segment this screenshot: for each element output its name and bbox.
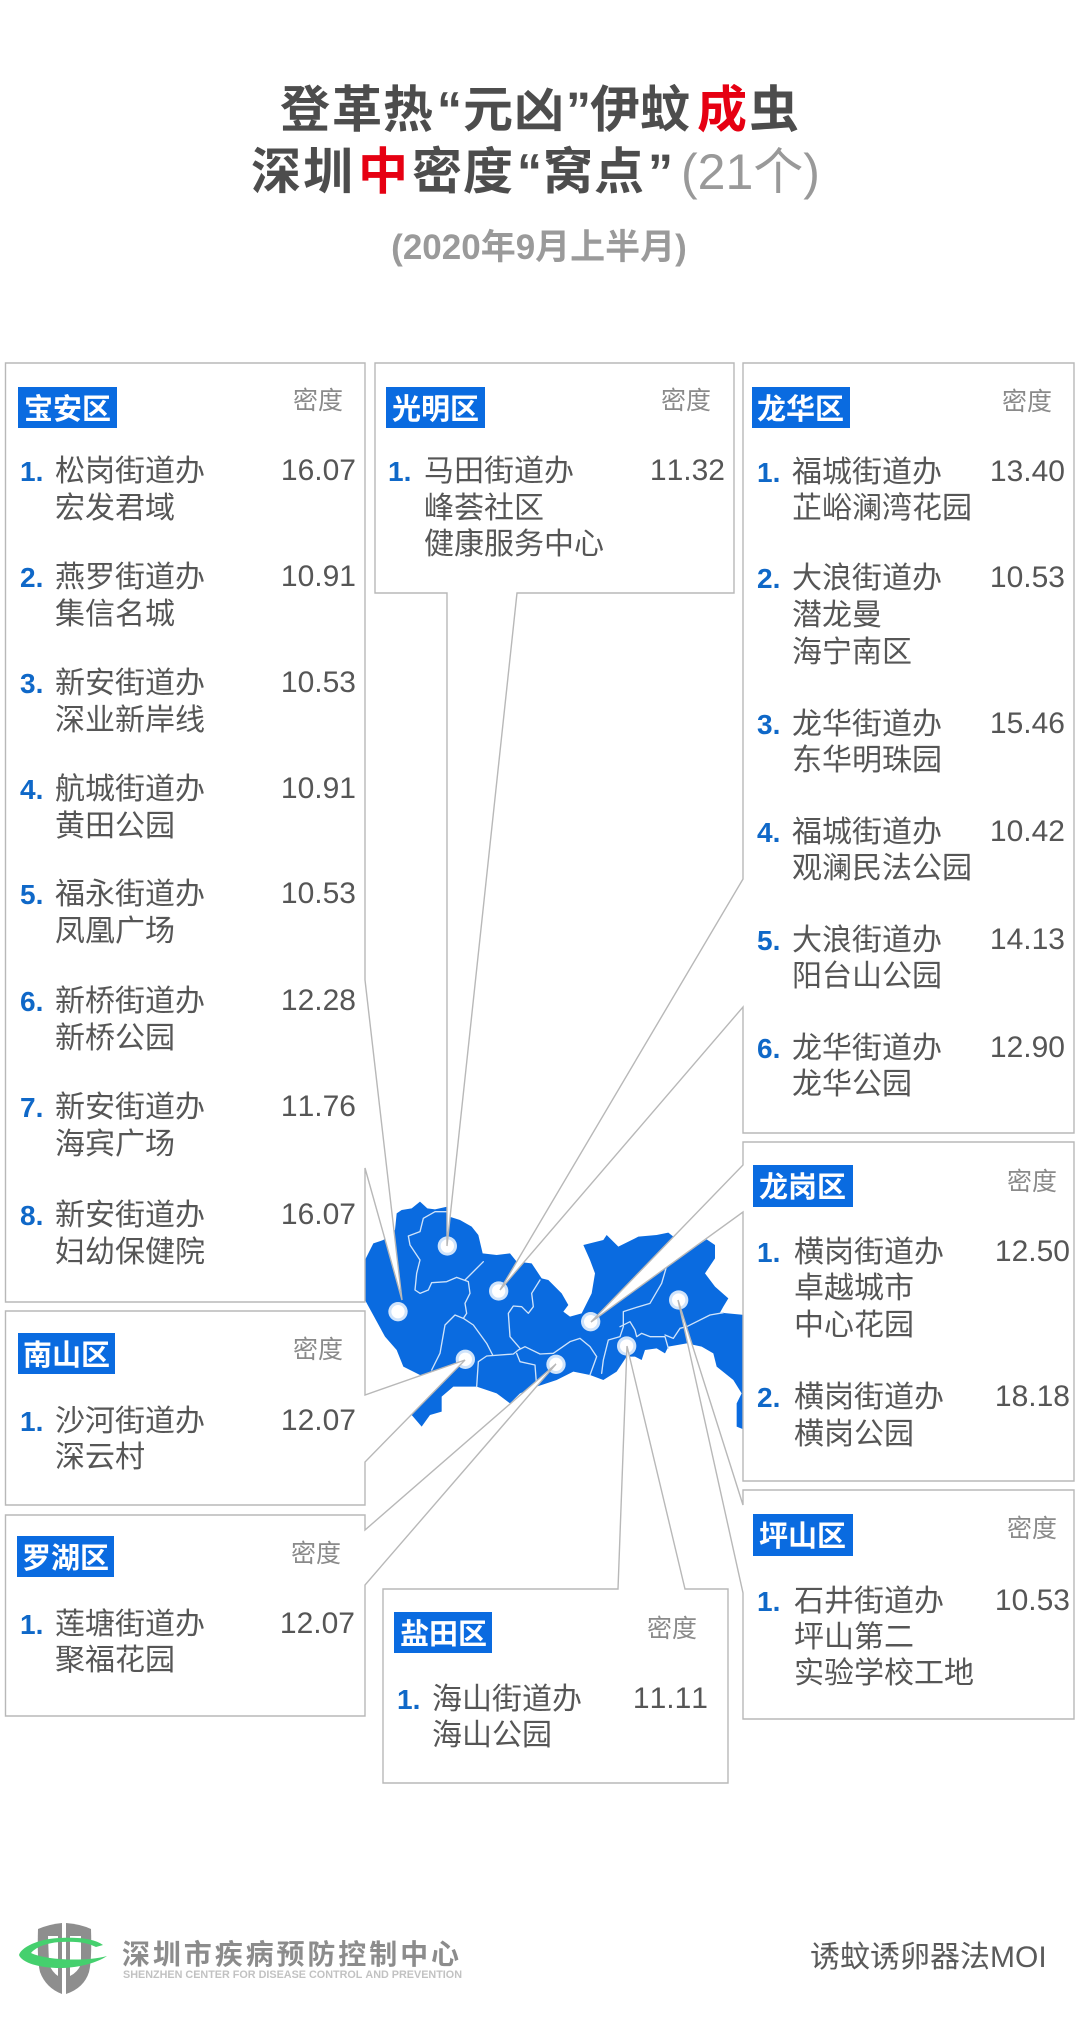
panel: 罗湖区: 聚福花园 [55,1644,175,1677]
panel: 宝安区: 16.07 [281,1198,356,1231]
panel: 坪山区: 坪山第二 [794,1621,914,1654]
panel: 宝安区: 10.53 [281,666,356,699]
panel: 龙华区: 福城街道办 [792,456,942,489]
panel: 南山区: 密度 [293,1336,343,1364]
title: 登革热“元凶”伊蚊 [280,82,690,138]
panel: 宝安区: 新桥街道办 [55,985,205,1018]
panel: 宝安区: 航城街道办 [55,773,205,806]
title: 深圳 [251,144,353,200]
organisation name: SHENZHEN CENTER FOR DISEASE CONTROL AND PREVENTION [123,1969,462,1981]
panel: 盐田区: 11.11 [633,1682,708,1715]
panel: 龙华区: 5. [757,925,780,956]
panel: 龙华区: 龙华区 [757,393,844,426]
title: 成 [697,82,747,138]
panel: 宝安区: 松岗街道办 [55,455,205,488]
title: 虫 [749,82,799,138]
panel: 龙岗区: 1. [757,1237,780,1268]
panel: 龙华区: 龙华公园 [792,1068,912,1101]
subtitle: date: (2020年9月上半月) [391,228,687,267]
title [251,82,820,200]
panel: 罗湖区: 莲塘街道办 [55,1608,205,1641]
title: 密度“窝点” [412,144,673,200]
panel: 盐田区: 海山公园 [432,1719,552,1752]
panel: 宝安区: 新安街道办 [55,1199,205,1232]
panel: 宝安区: 燕罗街道办 [55,561,205,594]
panel: 光明区: 1. [388,456,411,487]
panel: 罗湖区: 1. [20,1609,43,1640]
panel: 南山区: 南山区 [23,1339,110,1372]
panel: 龙岗区: 12.50 [995,1235,1070,1268]
panel: 光明区: 光明区 [392,393,479,426]
panel: 龙华区: 密度 [1002,388,1052,416]
panel: 坪山区: 密度 [1007,1515,1057,1543]
panel: 宝安区: 10.91 [281,772,356,805]
panel: 宝安区: 7. [20,1092,43,1123]
panel: 坪山区: 石井街道办 [794,1585,944,1618]
method note: 诱蚊诱卵器法MOI [810,1941,1047,1974]
panel: 坪山区 [678,1300,1074,1719]
panel: 盐田区 [383,1346,728,1783]
panel: 坪山区: 坪山区 [759,1520,846,1553]
panel: 龙华区: 芷峪澜湾花园 [792,492,972,525]
panel: 龙岗区: 龙岗区 [759,1171,846,1204]
panel: 龙华区: 13.40 [990,455,1065,488]
panel: 宝安区: 福永街道办 [55,878,205,911]
panel: 宝安区: 16.07 [281,454,356,487]
panel: 宝安区: 4. [20,774,43,805]
title: 中 [358,144,408,200]
panel: 南山区: 沙河街道办 [55,1405,205,1438]
panel: 盐田区: 盐田区 [400,1618,487,1651]
panel: 龙华区: 大浪街道办 [792,562,942,595]
panel: 宝安区: 12.28 [281,984,356,1017]
panel: 宝安区: 10.91 [281,560,356,593]
panel: 宝安区: 凤凰广场 [55,915,175,948]
panel: 龙华区: 福城街道办 [792,816,942,849]
organisation name: 深圳市疾病预防控制中心 [122,1939,462,1970]
panel: 盐田区: 海山街道办 [432,1683,582,1716]
panel: 龙华区: 2. [757,563,780,594]
panel: 龙岗区: 横岗街道办 [794,1381,944,1414]
panel: 宝安区: 深业新岸线 [55,704,205,737]
title: (21个) [681,144,820,200]
panel: 宝安区: 黄田公园 [55,810,175,843]
panel: 宝安区: 新安街道办 [55,667,205,700]
map of Shenzhen [365,1202,745,1430]
panel: 龙华区: 龙华街道办 [792,708,942,741]
panel: 龙岗区: 18.18 [995,1380,1070,1413]
panel: 龙岗区: 密度 [1007,1168,1057,1196]
panel: 坪山区: 实验学校工地 [794,1657,974,1690]
panel: 宝安区: 妇幼保健院 [55,1236,205,1269]
panel: 宝安区: 5. [20,879,43,910]
panel: 宝安区: 宏发君域 [55,492,175,525]
panel: 龙岗区: 横岗街道办 [794,1236,944,1269]
panel: 龙华区: 1. [757,457,780,488]
panel: 龙华区: 观澜民法公园 [792,852,972,885]
panel: 罗湖区 [6,1364,556,1716]
panel: 宝安区: 1. [20,456,43,487]
panel: 南山区 [6,1311,465,1505]
panel: 盐田区: 1. [397,1684,420,1715]
panel: 龙华区: 12.90 [990,1031,1065,1064]
panel: 宝安区: 2. [20,562,43,593]
panel: 光明区: 健康服务中心 [424,528,604,561]
panel: 罗湖区: 密度 [291,1540,341,1568]
panel: 宝安区: 密度 [293,387,343,415]
panel: 龙岗区: 中心花园 [794,1309,914,1342]
panel: 龙岗区: 卓越城市 [794,1272,914,1305]
panel: 龙华区: 10.53 [990,561,1065,594]
panel: 龙华区: 大浪街道办 [792,924,942,957]
panel: 光明区: 11.32 [650,454,725,487]
panel: 龙华区: 10.42 [990,815,1065,848]
panel: 龙华区: 6. [757,1033,780,1064]
map location dots [388,1236,688,1374]
panel: 宝安区: 宝安区 [24,393,111,426]
logo: Shenzhen CDC emblem [19,1923,107,1994]
panel: 龙华区: 14.13 [990,923,1065,956]
panel: 宝安区: 11.76 [281,1090,356,1123]
panel: 龙华区: 海宁南区 [792,636,912,669]
panel: 宝安区: 6. [20,986,43,1017]
panel: 宝安区: 8. [20,1200,43,1231]
panel: 龙华区: 潜龙曼 [792,599,882,632]
panel: 龙岗区: 2. [757,1382,780,1413]
panel: 龙华区: 3. [757,709,780,740]
panel: 光明区: 峰荟社区 [424,492,544,525]
panel: 龙岗区: 横岗公园 [794,1418,914,1451]
panel: 宝安区: 10.53 [281,877,356,910]
panel: 龙华区 [500,363,1074,1290]
panel: 宝安区: 集信名城 [55,598,175,631]
panel: 光明区 [375,363,734,1246]
panel: 龙华区: 东华明珠园 [792,744,942,777]
panel: 龙华区: 15.46 [990,707,1065,740]
panel: 光明区: 密度 [661,387,711,415]
panel: 坪山区: 1. [757,1586,780,1617]
panel: 罗湖区: 12.07 [280,1607,355,1640]
panel: 龙岗区 [591,1142,1074,1481]
panel: 坪山区: 10.53 [995,1584,1070,1617]
panel: 宝安区: 新桥公园 [55,1022,175,1055]
panel: 龙华区: 阳台山公园 [792,960,942,993]
panel: 龙华区: 龙华街道办 [792,1032,942,1065]
panel: 南山区: 12.07 [281,1404,356,1437]
panel: 南山区: 1. [20,1406,43,1437]
panel: 宝安区: 海宾广场 [55,1128,175,1161]
panel: 南山区: 深云村 [55,1441,145,1474]
panel: 光明区: 马田街道办 [424,455,574,488]
panel: 龙华区: 4. [757,817,780,848]
panel: 宝安区: 3. [20,668,43,699]
panel: 罗湖区: 罗湖区 [22,1543,109,1575]
panel: 宝安区 [6,363,402,1302]
panel: 宝安区: 新安街道办 [55,1091,205,1124]
panel: 盐田区: 密度 [647,1615,697,1643]
